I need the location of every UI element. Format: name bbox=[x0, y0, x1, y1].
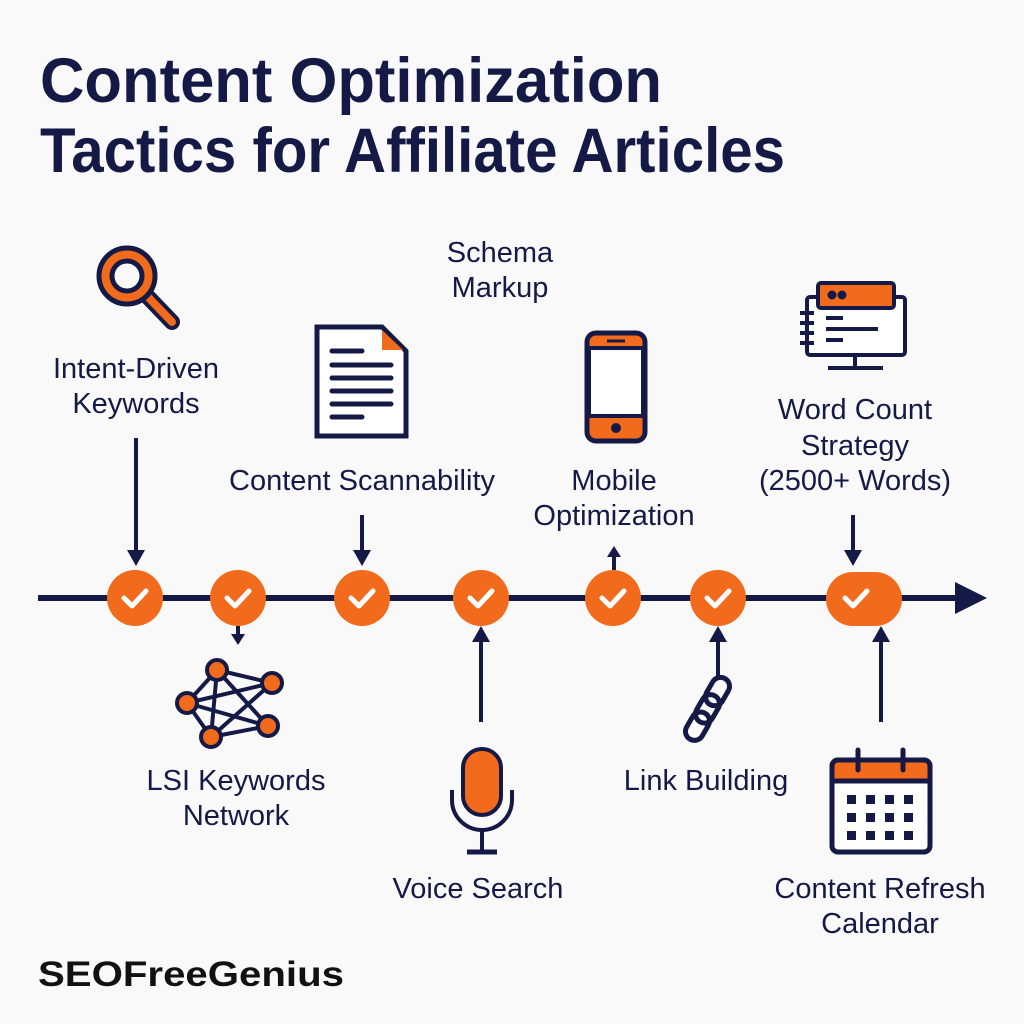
icon: phone bbox=[587, 333, 645, 441]
labels: Mobile bbox=[571, 465, 657, 497]
icon: microphone bbox=[452, 749, 512, 852]
icon: network bbox=[177, 660, 282, 747]
labels: (2500+ Words) bbox=[759, 465, 951, 497]
labels: Intent-Driven bbox=[53, 353, 219, 385]
labels: Word Count bbox=[778, 394, 932, 426]
title: Tactics for Affiliate Articles bbox=[40, 116, 785, 186]
labels: Markup bbox=[452, 272, 548, 304]
labels: LSI Keywords bbox=[147, 765, 325, 797]
icon: chain link bbox=[682, 674, 733, 744]
labels: Voice Search bbox=[393, 873, 563, 905]
icon: monitor bbox=[800, 283, 905, 368]
icon: calendar bbox=[832, 750, 930, 852]
labels: Keywords bbox=[72, 388, 200, 420]
labels: Strategy bbox=[801, 430, 909, 462]
arrows bbox=[127, 438, 890, 722]
icon: document bbox=[317, 327, 406, 436]
title: Content Optimization bbox=[40, 46, 662, 116]
labels: Optimization bbox=[533, 500, 695, 532]
checkpoints bbox=[107, 570, 902, 626]
labels: Link Building bbox=[624, 765, 788, 797]
labels: Calendar bbox=[821, 908, 939, 940]
labels: Network bbox=[183, 800, 290, 832]
labels: Schema bbox=[447, 237, 554, 269]
brand logo: SEOFreeGenius bbox=[38, 955, 344, 994]
icon: magnifier bbox=[99, 248, 172, 322]
timeline bbox=[38, 570, 987, 626]
labels: Content Refresh bbox=[774, 873, 986, 905]
title bbox=[40, 46, 785, 186]
labels bbox=[53, 237, 986, 940]
labels: Content Scannability bbox=[229, 465, 495, 497]
